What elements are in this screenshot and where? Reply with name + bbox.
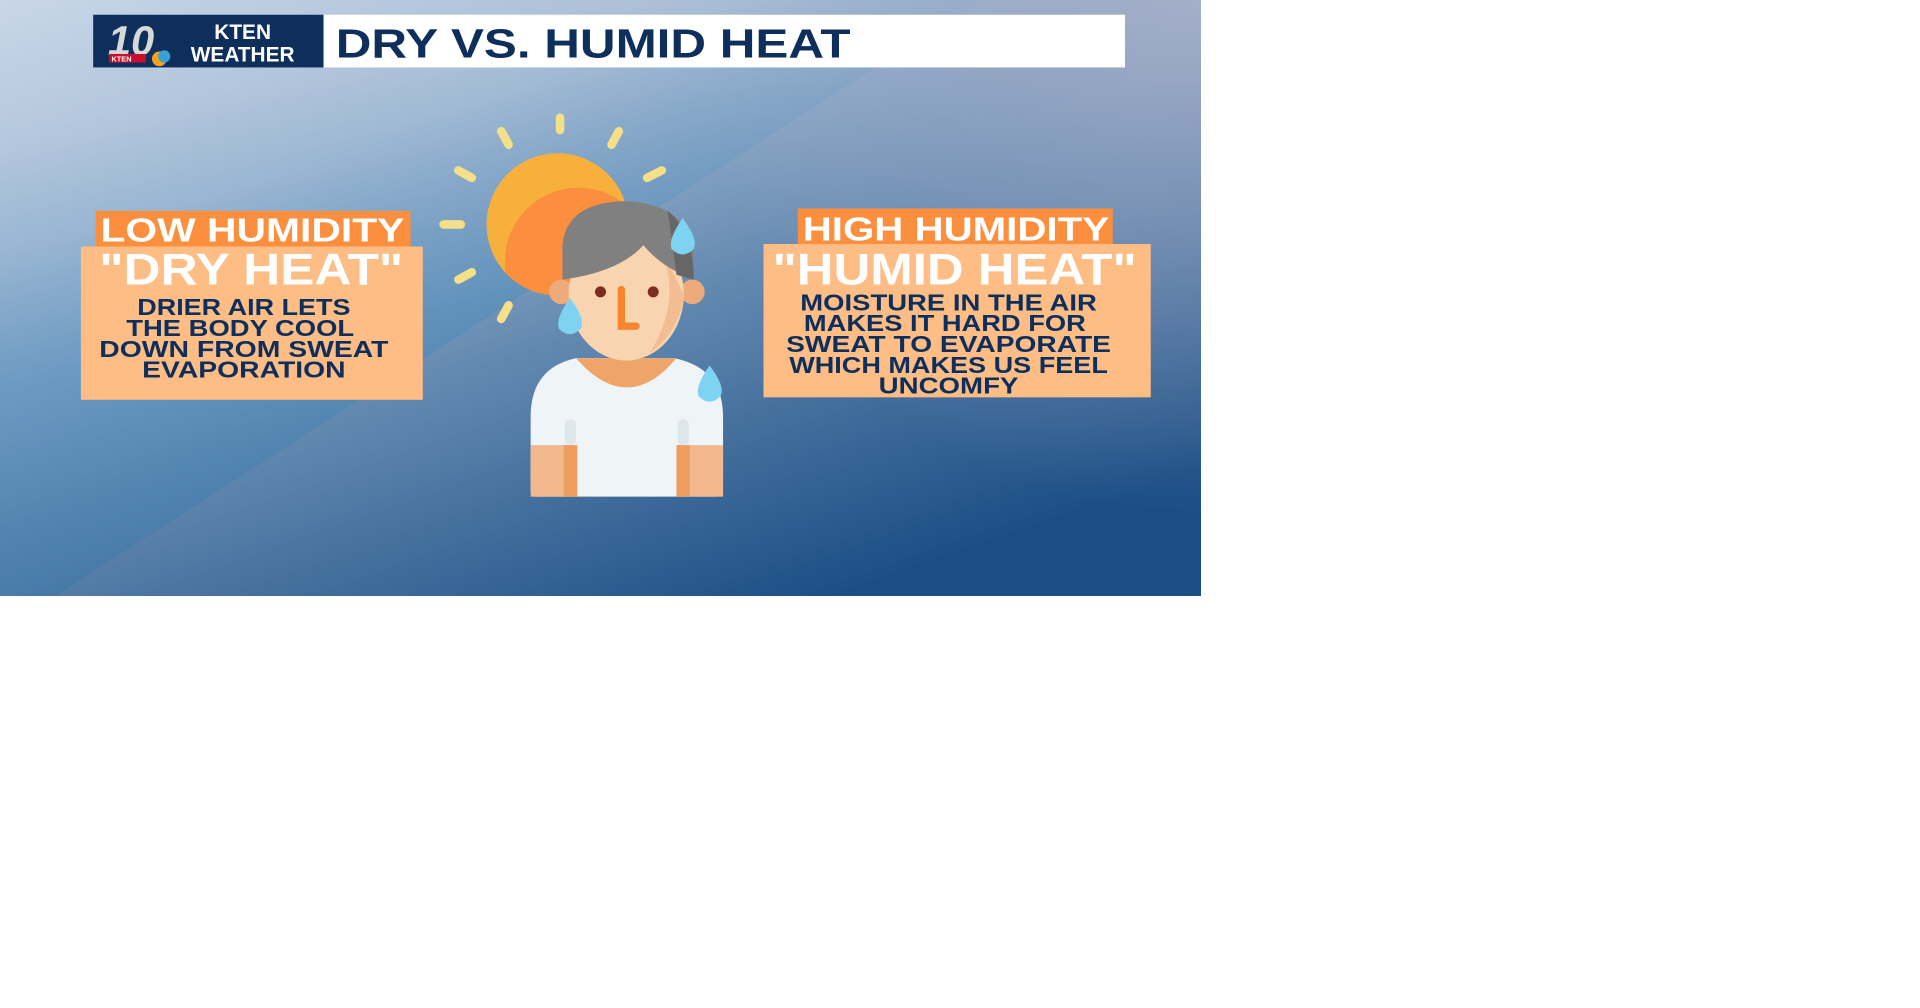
panel: high humidity / humid heat: MAKES IT HARD FOR xyxy=(804,310,1086,336)
sweat drops xyxy=(671,218,695,254)
hair xyxy=(563,201,694,280)
panel: high humidity / humid heat: HIGH HUMIDITY xyxy=(803,211,1109,248)
logo: KTEN weather: KTEN xyxy=(112,54,132,63)
logo: KTEN weather: KTEN xyxy=(214,21,271,44)
logo: KTEN weather: WEATHER xyxy=(191,43,295,66)
panel: high humidity / humid heat xyxy=(763,208,1151,399)
eyes & nose xyxy=(595,286,606,297)
icon: sun xyxy=(444,118,662,335)
panel: low humidity / dry heat xyxy=(81,211,423,400)
title: DRY VS. HUMID HEAT xyxy=(336,21,851,67)
ears xyxy=(549,280,574,304)
header bar xyxy=(93,15,1125,67)
panel: low humidity / dry heat: "DRY HEAT" xyxy=(99,245,403,295)
panel: low humidity / dry heat: LOW HUMIDITY xyxy=(100,213,404,250)
face xyxy=(569,228,684,361)
background xyxy=(0,0,1201,596)
collar xyxy=(576,358,676,388)
panel: high humidity / humid heat: WHICH MAKES US FEEL xyxy=(789,352,1108,378)
shirt xyxy=(531,358,723,497)
logo: KTEN weather xyxy=(93,15,324,67)
panel: low humidity / dry heat: EVAPORATION xyxy=(142,357,346,383)
panel: high humidity / humid heat: SWEAT TO EVAPORATE xyxy=(786,331,1111,357)
icon: sweating person xyxy=(531,201,723,497)
panel: low humidity / dry heat: THE BODY COOL xyxy=(126,315,354,341)
panel: high humidity / humid heat: MOISTURE IN THE AIR xyxy=(800,289,1097,315)
panel: high humidity / humid heat: UNCOMFY xyxy=(879,373,1019,399)
panel: low humidity / dry heat: DRIER AIR LETS xyxy=(137,294,350,320)
panel: high humidity / humid heat: "HUMID HEAT" xyxy=(773,245,1137,295)
logo: KTEN weather: 10 xyxy=(108,17,154,64)
panel: low humidity / dry heat: DOWN FROM SWEAT xyxy=(99,336,388,362)
